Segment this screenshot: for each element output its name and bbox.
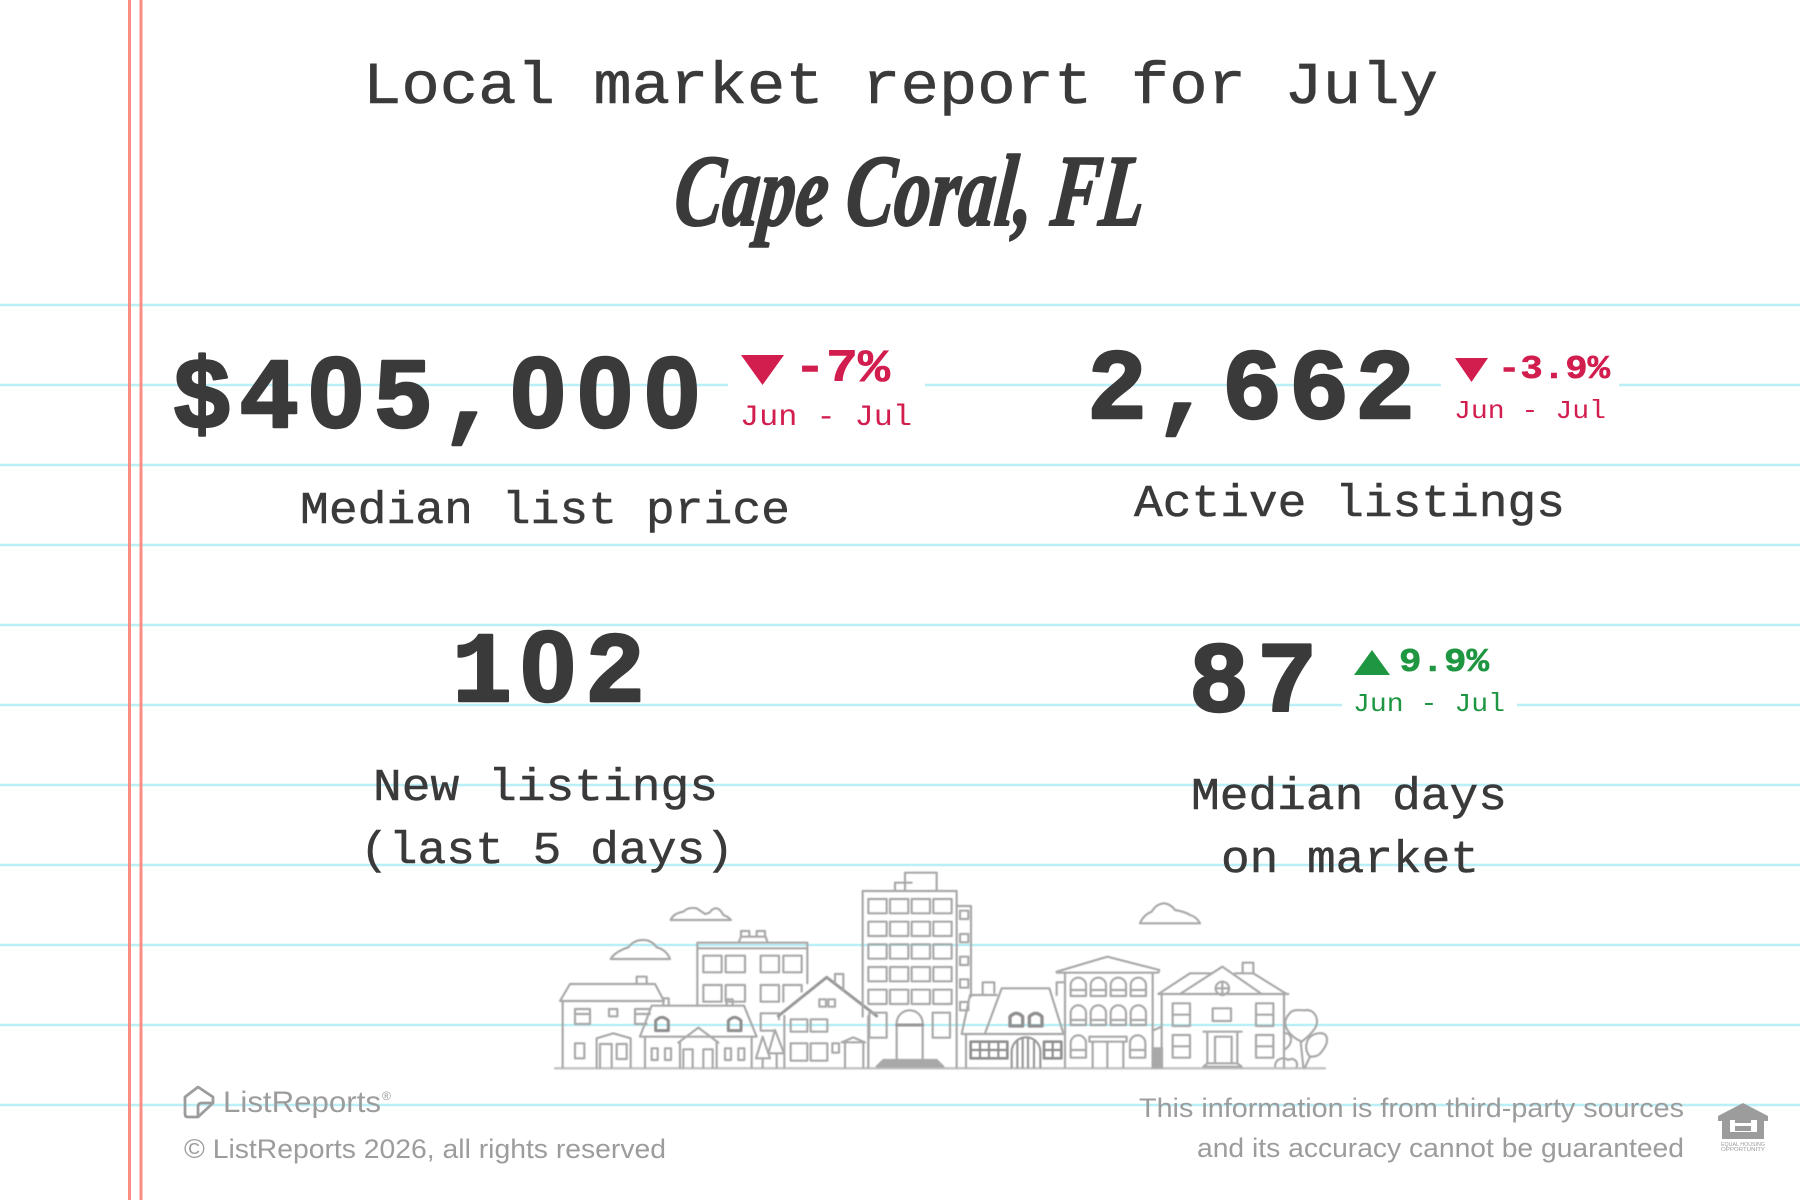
value: median days on market: 8 <box>1189 629 1249 742</box>
label: new listings: (last 5 days) <box>360 826 734 877</box>
delta: active listings: -3.9% <box>1498 351 1610 388</box>
delta: median list price: Jun - Jul <box>740 401 912 435</box>
value: active listings: , <box>1154 336 1214 449</box>
label: new listings: New listings <box>373 763 718 814</box>
delta: median days on market <box>1353 644 1505 719</box>
label: active listings: Active listings <box>1134 479 1565 530</box>
footer: disclaimer: and its accuracy cannot be guaranteed <box>1197 1133 1684 1163</box>
wordmark: ListReports <box>223 1086 381 1119</box>
label: new listings <box>360 763 734 877</box>
stat: new listings <box>360 611 734 877</box>
value: median list price: 0 <box>577 337 633 449</box>
stat: active listings <box>1087 336 1610 530</box>
icon: listreports logo <box>185 1087 213 1117</box>
value: new listings: 0 <box>520 611 576 723</box>
value: active listings: 6 <box>1289 336 1349 449</box>
delta: active listings: Jun - Jul <box>1454 396 1606 426</box>
label: median list price: Median list price <box>300 486 790 537</box>
value: new listings: 1 <box>452 619 512 732</box>
value: active listings: 2 <box>1087 336 1147 449</box>
delta: median list price <box>740 343 912 435</box>
stat: median list price <box>172 337 912 537</box>
footer: disclaimer <box>1139 1093 1684 1163</box>
stat: median days on market <box>1189 629 1507 886</box>
value: median list price: 5 <box>373 345 433 458</box>
value: median list price: $ <box>172 345 232 458</box>
value: median list price: 4 <box>239 345 299 458</box>
delta: active listings <box>1454 351 1610 426</box>
value: new listings: 2 <box>585 619 645 732</box>
value: active listings: 6 <box>1222 336 1282 449</box>
value: active listings: 2 <box>1355 336 1415 449</box>
delta: median days on market: Jun - Jul <box>1353 689 1505 719</box>
footer: brand <box>184 1086 666 1164</box>
label: median days on market: Median days <box>1191 772 1507 823</box>
value: median list price: 0 <box>308 337 364 449</box>
value: median list price: , <box>440 345 500 458</box>
icon: equal housing opportunity: OPPORTUNITY <box>1721 1147 1766 1153</box>
copyright: © ListReports 2026, all rights reserved <box>184 1134 666 1164</box>
title: Local market report for July <box>363 54 1438 121</box>
value: median list price: 0 <box>644 337 700 449</box>
label: median days on market: on market <box>1221 835 1479 886</box>
illustration: town skyline <box>555 873 1327 1068</box>
value: median days on market: 7 <box>1257 629 1317 742</box>
label: median days on market <box>1191 772 1507 886</box>
delta: median days on market: 9.9% <box>1399 644 1489 681</box>
location heading: Cape Coral, FL <box>670 135 1151 248</box>
footer: disclaimer: This information is from third-party sources <box>1139 1093 1684 1123</box>
value: median list price: 0 <box>510 337 566 449</box>
icon: equal housing opportunity: EQUAL HOUSING <box>1721 1142 1765 1148</box>
icon: equal housing opportunity <box>1718 1103 1768 1153</box>
registered mark: ® <box>382 1089 391 1103</box>
delta: median list price: -7% <box>794 343 890 395</box>
